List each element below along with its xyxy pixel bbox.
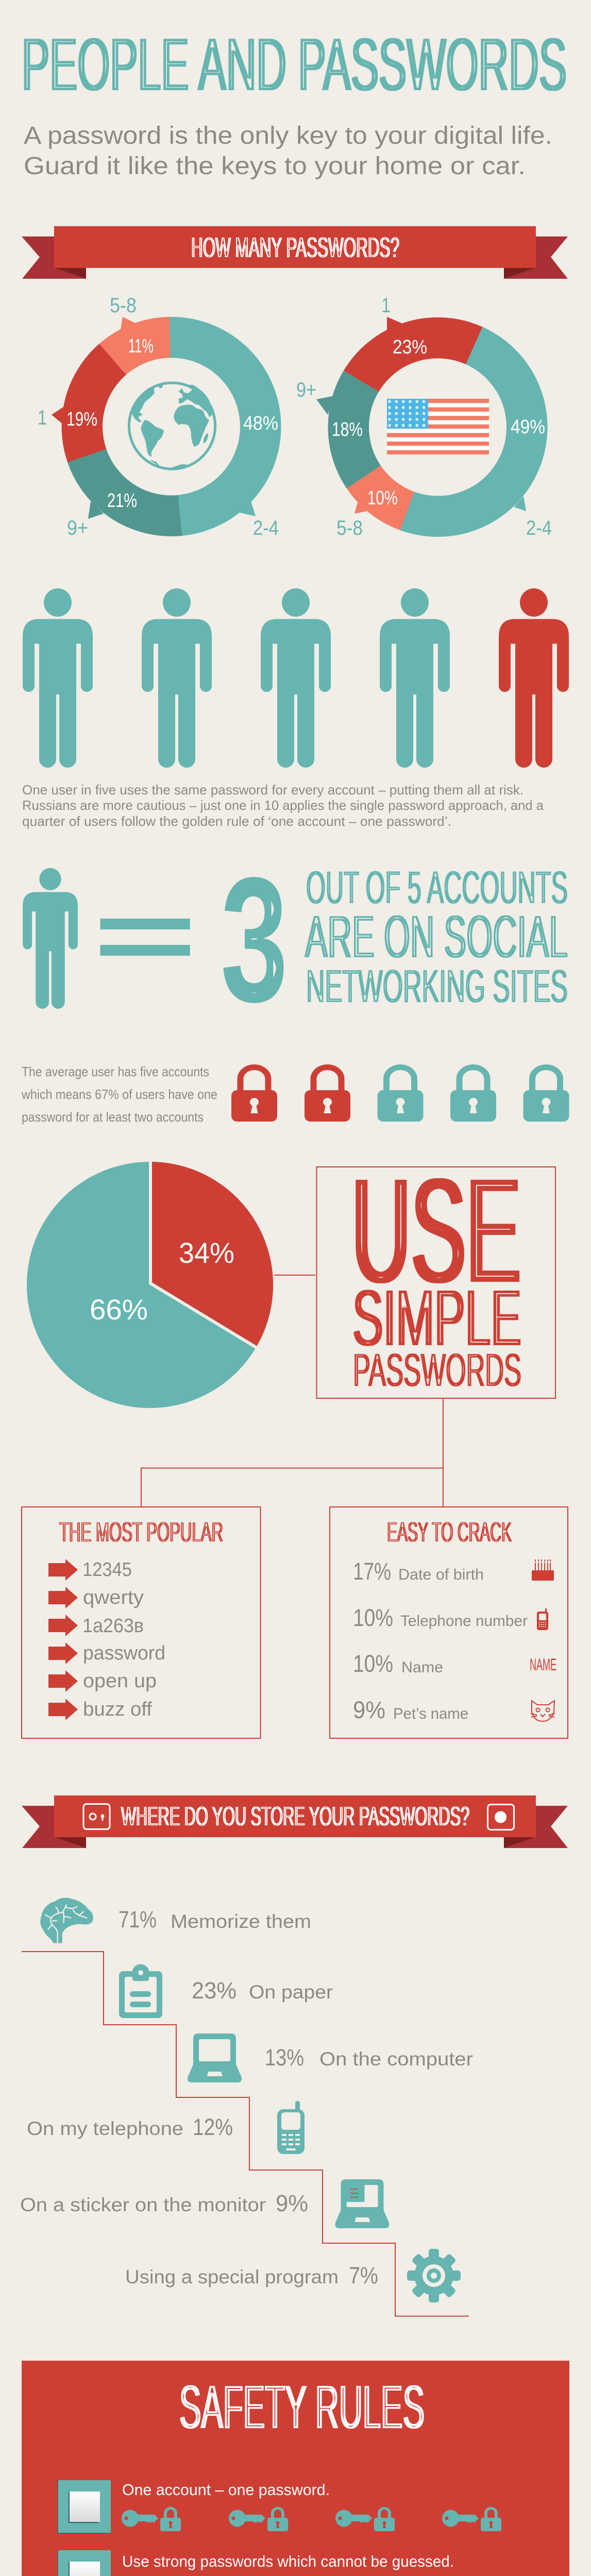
donut values: 23% (393, 336, 427, 358)
icon: mobile phone (277, 2101, 305, 2154)
donut chart: worldwide (38, 294, 297, 552)
donut legends: 2-4 (526, 517, 552, 539)
banner: how many passwords (22, 226, 568, 279)
icon: laptop (188, 2033, 242, 2082)
item: on paper: On paper (249, 1981, 333, 2003)
item: memorize: Memorize them (171, 1911, 311, 1932)
subtitle (24, 122, 552, 180)
text: average user (21, 1064, 217, 1125)
item: on paper (119, 1964, 333, 2018)
icon: person (23, 868, 78, 1009)
password list: buzz off (83, 1699, 152, 1720)
panel: the most popular (22, 1507, 261, 1738)
rule 1: One account – one password. (122, 2481, 330, 2499)
item: on the computer: On the computer (319, 2048, 473, 2070)
password list: 1a263в (82, 1615, 144, 1637)
people row: one in five (23, 588, 569, 768)
connector lines (141, 1275, 443, 1507)
donut values: 18% (332, 419, 363, 440)
crack list: Telephone number (400, 1613, 528, 1630)
item: on my telephone (27, 2101, 305, 2154)
item: memorize: 71% (119, 1906, 157, 1933)
icon: safe right (487, 1804, 514, 1830)
crack list (353, 1557, 528, 1723)
item: on my telephone: On my telephone (27, 2118, 183, 2139)
icon: globe (129, 383, 215, 470)
text: one user in five: quarter of users follow the golden rule of ‘one account – one password’. (22, 814, 451, 829)
donut values: 21% (107, 490, 137, 512)
staircase line (22, 1952, 469, 2316)
text: average user: The average user has five accounts (22, 1064, 209, 1079)
donut values: 10% (367, 487, 398, 509)
item: sticker on monitor (20, 2179, 390, 2228)
icon: clipboard (119, 1964, 162, 2018)
text: average user: which means 67% of users have one (21, 1087, 217, 1102)
item: memorize (40, 1898, 311, 1943)
donut legends: 2-4 (253, 517, 279, 539)
password list: 12345 (82, 1559, 132, 1581)
rule 2 (58, 2550, 477, 2576)
item: sticker on monitor: 9% (276, 2190, 308, 2216)
icon: cake (532, 1560, 554, 1581)
panel: easy to crack (330, 1507, 568, 1738)
item: special program: Using a special program (125, 2266, 339, 2287)
password list: qwerty (83, 1587, 144, 1608)
icons: padlocks (231, 1064, 569, 1122)
donut legends (38, 294, 279, 539)
text: one user in five (22, 782, 544, 829)
donut legends: 9+ (296, 379, 316, 401)
icon: cat (531, 1701, 555, 1721)
panel heading: THE MOST POPULAR (59, 1517, 223, 1548)
donut legends (296, 294, 552, 539)
banner: where do you store (22, 1795, 568, 1848)
crack list: Pet’s name (393, 1705, 468, 1722)
icons: arrows (48, 1559, 78, 1720)
donut legends: 5-8 (336, 517, 363, 539)
crack list: 10% (353, 1650, 393, 1677)
heading: out of 5 accounts (305, 861, 568, 1012)
item: on my telephone: 12% (193, 2114, 233, 2140)
item: special program: 7% (349, 2262, 378, 2289)
text: one user in five: Russians are more cautious – just one in 10 applies the single password approach, and a (22, 798, 544, 813)
crack list: 9% (353, 1696, 385, 1723)
donut values: 19% (66, 409, 97, 430)
donut chart: USA (296, 294, 562, 551)
password list: password (83, 1642, 165, 1664)
crack list: 10% (353, 1604, 393, 1631)
pie chart: 34 vs 66: 66% (90, 1293, 148, 1326)
rule 2: Use strong passwords which cannot be guessed. (122, 2552, 454, 2570)
donut legends: 1 (381, 294, 391, 317)
donut legends: 5-8 (110, 294, 137, 317)
password list (82, 1559, 165, 1720)
crack list: 17% (353, 1557, 391, 1585)
icon: laptop with sticker (335, 2179, 390, 2228)
item: sticker on monitor: On a sticker on the monitor (20, 2194, 266, 2215)
pie chart: 34 vs 66 (27, 1160, 273, 1408)
donut legends: 1 (38, 406, 47, 429)
item: on the computer (188, 2033, 473, 2082)
donut legends: 9+ (67, 517, 88, 539)
item: on the computer: 13% (265, 2044, 304, 2071)
crack list: Date of birth (398, 1566, 484, 1583)
icon: equals sign (100, 919, 190, 956)
subtitle: Guard it like the keys to your home or car. (24, 152, 526, 180)
banner heading: HOW MANY PASSWORDS? (191, 231, 399, 263)
icon: safe left (83, 1804, 110, 1829)
icon: brain (40, 1898, 93, 1943)
text: one user in five: One user in five uses the same password for every account – putting them all at risk. (22, 782, 524, 798)
donut values: 11% (128, 335, 154, 357)
crack list: Name (401, 1659, 443, 1676)
pie chart: 34 vs 66: 34% (179, 1236, 234, 1269)
donut values (66, 335, 278, 512)
panel: use simple passwords (316, 1148, 555, 1398)
donut values: 48% (243, 413, 278, 434)
icon: US flag (387, 399, 489, 454)
rule 1 (58, 2480, 501, 2533)
donut values (332, 336, 545, 509)
icons: keys and locks (122, 2507, 501, 2531)
text: average user: password for at least two accounts (22, 1109, 204, 1125)
panel: safety rules (22, 2361, 569, 2576)
item: on paper: 23% (192, 1977, 237, 2004)
item: special program (125, 2249, 461, 2302)
subtitle: A password is the only key to your digital life. (24, 122, 552, 149)
donut values: 49% (511, 416, 545, 438)
icon: phone (537, 1608, 548, 1630)
icon: name: NAME (530, 1655, 556, 1674)
big number 3: 3 (221, 841, 288, 1039)
icon: gear (407, 2249, 461, 2302)
password list: open up (83, 1670, 157, 1692)
